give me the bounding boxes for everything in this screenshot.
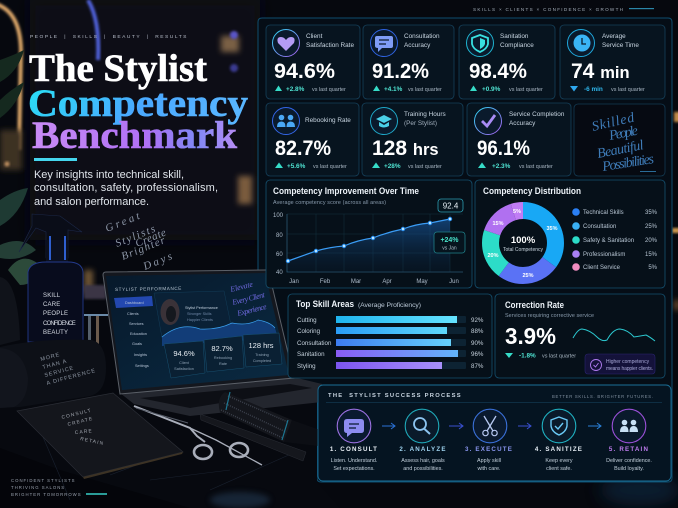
script note: great stylists: Stylists	[114, 223, 157, 250]
step 5: retain: 5. RETAIN	[609, 446, 649, 453]
line chart: 100	[273, 213, 284, 219]
line chart: Jan	[289, 279, 299, 285]
notebook	[17, 393, 183, 479]
KPI card: consultation accuracy: 91.2%	[372, 60, 429, 83]
callout: 92.4	[438, 199, 463, 212]
KPI card: client satisfaction: Satisfaction Rate	[306, 42, 354, 49]
notebook text: CREATE	[67, 416, 94, 428]
towel text: SERVICE	[44, 365, 75, 379]
laptop dashboard screen: Insights	[134, 353, 147, 357]
KPI card: sanitation compliance: Compliance	[500, 42, 534, 49]
panel: correction rate: Services requiring corrective service	[505, 313, 594, 319]
legend: 15%	[645, 252, 658, 258]
step 5: retain	[606, 409, 652, 472]
KPI card: consultation accuracy	[363, 25, 454, 99]
KPI card: service completion	[467, 103, 571, 176]
KPI card: client satisfaction	[266, 25, 360, 99]
laptop dashboard screen: 128 hrs	[248, 341, 274, 350]
KPI card: service completion: vs last quarter	[519, 164, 553, 170]
towel text: THAN A	[42, 359, 68, 371]
KPI card: client satisfaction: 94.6%	[274, 60, 335, 83]
bottom left tagline: CONFIDENT STYLISTS	[11, 478, 75, 483]
script card: Skilled	[591, 110, 637, 135]
legend: 25%	[645, 224, 658, 230]
line chart: 40	[276, 270, 283, 276]
bottle label: CONFIDENCE	[43, 321, 76, 327]
title	[28, 47, 249, 157]
donut chart: 25%	[522, 273, 534, 279]
callout: +24% vs Jan: vs Jan	[442, 246, 457, 252]
bar chart: Sanitation	[297, 351, 325, 358]
legend: Consultation	[583, 224, 616, 230]
panel: correction rate: vs last quarter	[542, 354, 576, 360]
KPI card: service completion: +2.3%	[492, 163, 511, 170]
KPI card: consultation accuracy: Consultation	[404, 33, 440, 40]
panel: competency distribution: 100%	[511, 235, 536, 246]
step 2: analyze: Assess hair, goals	[401, 458, 445, 464]
bar chart: 92%	[471, 317, 484, 324]
laptop	[103, 270, 322, 416]
panel: competency distribution	[475, 180, 665, 288]
round brush	[219, 392, 320, 446]
script card: Beautiful	[596, 138, 645, 162]
laptop dashboard screen: Client	[179, 361, 190, 365]
laptop dashboard screen: STYLIST PERFORMANCE	[115, 286, 182, 292]
KPI card: rebooking rate: Rebooking Rate	[305, 117, 351, 124]
script card	[574, 104, 665, 176]
bar chart: 90%	[471, 340, 484, 347]
line chart: 80	[276, 233, 283, 239]
legend: 35%	[645, 210, 658, 216]
KPI card: training hours: vs last quarter	[408, 164, 442, 170]
laptop dashboard screen: 94.6%	[173, 349, 195, 358]
arrow	[588, 423, 601, 429]
KPI card: sanitation compliance: vs last quarter	[509, 87, 543, 93]
bottle label: CARE	[43, 302, 60, 308]
bottom left tagline: THRIVING SALONS	[11, 485, 65, 490]
KPI card: training hours: +28%	[384, 163, 401, 170]
step 1: consult	[330, 409, 378, 472]
step 4: sanitize: Keep every	[545, 458, 573, 464]
bar chart: Styling	[297, 363, 316, 370]
laptop dashboard screen: Elevate	[228, 280, 254, 294]
bar chart: 96%	[471, 351, 484, 358]
laptop dashboard screen: Stylist Performance	[185, 306, 218, 310]
KPI card: sanitation compliance: 98.4%	[469, 60, 527, 83]
step 4: sanitize	[535, 409, 583, 472]
notebook text: CONSULT	[61, 408, 93, 421]
donut chart	[487, 209, 558, 279]
bar chart: Coloring	[297, 328, 321, 335]
title: The Stylist	[29, 47, 207, 90]
script note: great stylists	[104, 210, 174, 273]
legend: Client Service	[583, 265, 621, 271]
laptop dashboard screen: Settings	[135, 364, 149, 368]
panel: correction rate: 3.9%	[505, 323, 556, 349]
KPI card: consultation accuracy: Accuracy	[404, 42, 431, 49]
KPI card: rebooking rate: 82.7%	[275, 137, 331, 160]
laptop dashboard screen: Satisfaction	[174, 367, 194, 371]
step 3: execute: Apply skill	[477, 458, 501, 464]
KPI card: service completion: Service Completion	[509, 111, 565, 118]
comb	[200, 414, 306, 461]
callout: higher competency: means happier clients.	[606, 366, 653, 372]
legend: 5%	[648, 265, 658, 271]
KPI card: average service time: -6 min	[584, 86, 603, 93]
KPI card: rebooking rate	[266, 103, 359, 176]
line chart: May	[416, 279, 428, 285]
subtitle: Key insights into technical skill,	[34, 169, 184, 181]
donut chart: 35%	[546, 226, 558, 232]
KPI card: client satisfaction: vs last quarter	[312, 87, 346, 93]
laptop dashboard screen: 82.7%	[211, 344, 233, 353]
script note: great stylists: Brighter	[120, 234, 167, 263]
callout: +24% vs Jan	[434, 232, 465, 253]
KPI card: training hours: (Per Stylist)	[404, 120, 437, 127]
script card: Possibilities	[600, 152, 656, 175]
donut chart: 15%	[492, 221, 504, 227]
laptop dashboard screen: Dashboard	[125, 301, 144, 305]
KPI card: average service time: 74 min	[571, 60, 630, 83]
panel: top skill areas: (Average Proficiency)	[358, 302, 421, 309]
bar chart	[297, 316, 484, 370]
KPI card: training hours: Training Hours	[404, 111, 446, 118]
panel: stylist success process	[318, 385, 671, 481]
line chart: Jun	[449, 279, 459, 285]
line chart: 60	[276, 252, 283, 258]
towel text: A DIFFERENCE	[46, 368, 97, 387]
KPI card: sanitation compliance: Sanitation	[500, 33, 529, 40]
legend	[572, 208, 658, 271]
panel: top skill areas	[288, 294, 492, 378]
laptop dashboard screen: Education	[130, 332, 147, 336]
notebook text	[61, 408, 105, 447]
KPI card: training hours: 128 hrs	[372, 137, 439, 160]
icon: heart	[272, 30, 300, 56]
step 2: analyze: and possibilities.	[403, 466, 443, 472]
script note: great stylists: Days	[141, 250, 174, 273]
KPI card: average service time: Average	[602, 33, 626, 40]
arrow	[382, 423, 395, 429]
arrow	[518, 423, 531, 429]
step 4: sanitize: client safe.	[546, 466, 572, 472]
towel text	[40, 352, 97, 387]
title accent bar	[34, 158, 77, 161]
panel: competency improvement line chart: Competency Improvement Over Time	[273, 186, 419, 197]
KPI card: average service time: Service Time	[602, 42, 639, 49]
legend: Professionalism	[583, 252, 625, 258]
towels	[0, 277, 106, 408]
step 3: execute: with care.	[476, 466, 501, 472]
donut chart: 5%	[513, 209, 521, 215]
bottom left tagline	[11, 478, 107, 497]
panel: competency distribution: Total Competency	[503, 247, 544, 253]
step 4: sanitize: 4. SANITIZE	[535, 446, 583, 453]
subtitle: consultation, safety, professionalism,	[34, 182, 218, 194]
panel: top skill areas: Top Skill Areas	[296, 299, 354, 310]
panel: correction rate: -1.8%	[519, 352, 536, 360]
script card: People	[607, 124, 639, 144]
step 3: execute	[465, 409, 513, 472]
script note: great stylists: Great	[104, 210, 142, 235]
KPI card: training hours	[362, 103, 463, 176]
laptop dashboard screen: Happier Clients	[187, 318, 213, 322]
legend: Safety & Sanitation	[583, 238, 634, 244]
legend: 20%	[645, 238, 658, 244]
KPI card: rebooking rate: +5.6%	[287, 163, 306, 170]
KPI card: average service time	[560, 25, 665, 99]
top left tagline: PEOPLE | SKILLS | BEAUTY | RESULTS	[30, 34, 188, 40]
KPI card: sanitation compliance: +0.9%	[482, 86, 501, 93]
callout: 92.4: 92.4	[443, 202, 459, 210]
panel: competency improvement line chart: Average competency score (across all areas)	[273, 200, 386, 206]
bar chart: 88%	[471, 328, 484, 335]
laptop dashboard screen: Completed	[253, 359, 271, 363]
panel: correction rate: Correction Rate	[505, 300, 564, 311]
bottle label: PEOPLE	[43, 311, 68, 317]
title: Competency	[28, 82, 249, 125]
sparkline	[573, 329, 655, 341]
line chart: Mar	[351, 279, 361, 285]
laptop dashboard screen: Stronger Skills	[187, 312, 212, 316]
step 5: retain: Deliver confidence.	[606, 458, 652, 464]
laptop dashboard screen: Rebooking	[214, 356, 232, 360]
title: Benchmark	[32, 114, 237, 157]
notebook text: CARE	[75, 428, 93, 436]
notebook text: RETAIN	[80, 436, 105, 447]
KPI card: rebooking rate: vs last quarter	[313, 164, 347, 170]
icon: people	[272, 108, 300, 134]
subtitle	[34, 169, 218, 208]
line chart	[273, 213, 463, 285]
icon: speech bubble	[370, 30, 398, 56]
icon: shield	[466, 30, 494, 56]
callout: +24% vs Jan: +24%	[440, 237, 459, 244]
KPI card: sanitation compliance	[459, 25, 555, 99]
bottom left tagline: BRIGHTER TOMORROWS	[11, 492, 82, 497]
KPI card: average service time: vs last quarter	[611, 87, 645, 93]
KPI card: client satisfaction: +2.8%	[286, 86, 305, 93]
legend: Technical Skills	[583, 210, 624, 216]
laptop dashboard screen	[114, 280, 282, 378]
spray bottle	[19, 214, 83, 342]
panel: competency improvement line chart	[266, 180, 472, 288]
line chart: Feb	[320, 279, 331, 285]
panel: stylist success process: BETTER SKILLS. BRIGHTER FUTURES.	[552, 394, 653, 399]
icon: clock	[568, 30, 594, 56]
towel text: MORE	[40, 352, 61, 363]
step 2: analyze: 2. ANALYZE	[399, 446, 447, 453]
subtitle: and salon performance.	[34, 196, 149, 208]
scissors	[134, 406, 262, 465]
laptop dashboard screen: Experience	[235, 302, 268, 318]
laptop dashboard screen: Services	[129, 322, 144, 326]
laptop dashboard screen: Every Client	[230, 290, 266, 307]
script note: great stylists: Create	[134, 227, 168, 250]
line chart: Apr	[382, 279, 392, 285]
top right tagline: SKILLS × CLIENTS × CONFIDENCE × GROWTH	[473, 7, 623, 12]
icon: check mark	[474, 108, 502, 134]
step 2: analyze	[399, 409, 447, 472]
donut chart: 20%	[487, 253, 499, 259]
step 5: retain: Build loyalty.	[614, 466, 644, 472]
KPI card: service completion: Accuracy	[509, 120, 536, 127]
bar chart: Cutting	[297, 317, 317, 324]
counter: black marble	[0, 384, 340, 508]
KPI card: consultation accuracy: vs last quarter	[408, 87, 442, 93]
panel: correction rate	[495, 294, 665, 378]
dashboard frame	[258, 18, 672, 482]
KPI card: consultation accuracy: +4.1%	[384, 86, 403, 93]
laptop dashboard screen: Clients	[127, 312, 139, 316]
bottle label: BEAUTY	[43, 330, 68, 336]
step 1: consult: Listen. Understand.	[331, 458, 377, 464]
callout: higher competency	[585, 354, 655, 374]
panel: stylist success process: THE STYLIST SUCCESS PROCESS	[328, 393, 462, 399]
laptop dashboard screen: Rate	[219, 362, 227, 366]
KPI card: client satisfaction: Client	[306, 33, 323, 40]
bar chart: Consultation	[297, 340, 332, 347]
laptop dashboard screen: Training	[255, 353, 269, 357]
icon: graduation cap	[370, 108, 398, 134]
panel: competency distribution: Competency Distribution	[483, 186, 581, 197]
bar chart: 87%	[471, 363, 484, 370]
callout: higher competency: Higher competency	[606, 359, 650, 365]
plant leaves	[0, 50, 40, 285]
step 1: consult: 1. CONSULT	[330, 446, 378, 453]
arrow	[449, 423, 463, 429]
step 3: execute: 3. EXECUTE	[465, 446, 513, 453]
laptop dashboard screen: Goals	[132, 342, 142, 346]
step 1: consult: Set expectations.	[333, 466, 375, 472]
bottle label: SKILL	[43, 293, 61, 299]
KPI card: service completion: 96.1%	[477, 137, 530, 160]
bottle label	[43, 293, 76, 336]
